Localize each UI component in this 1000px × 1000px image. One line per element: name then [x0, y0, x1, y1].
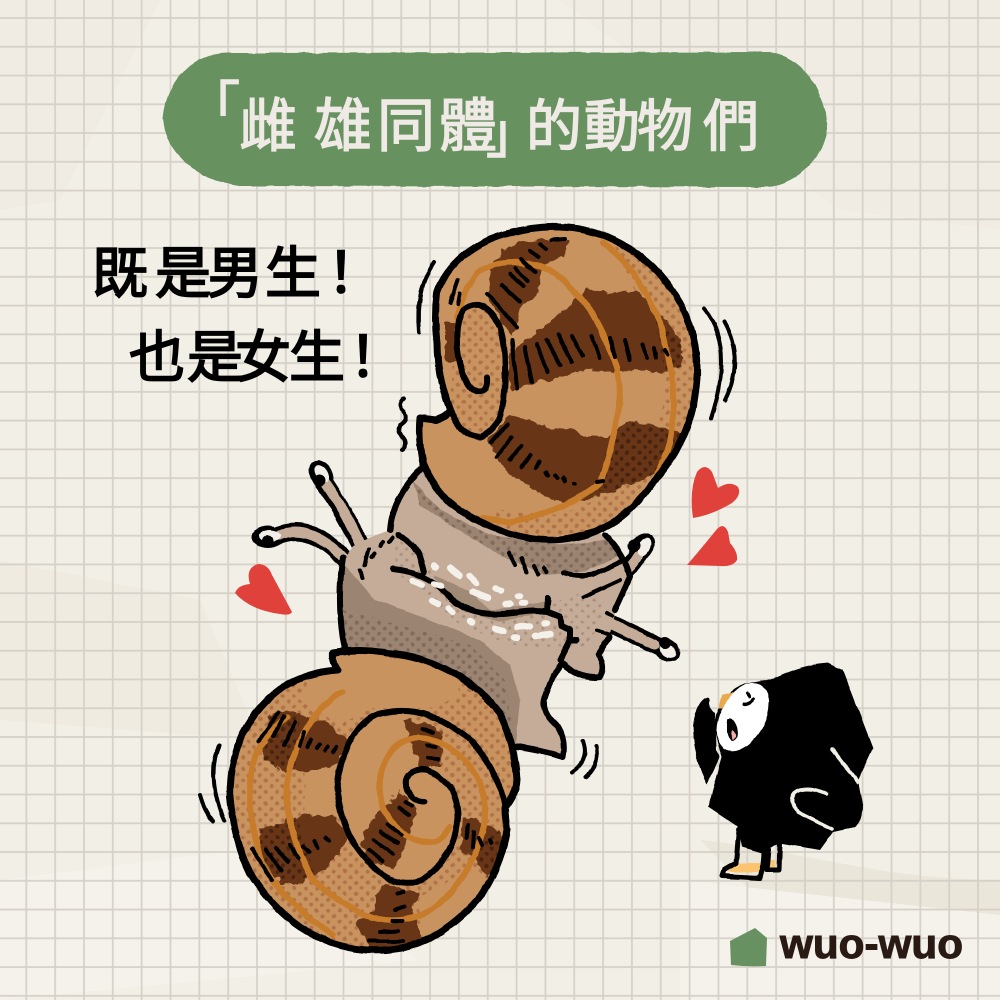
halftone around central seam — [395, 530, 603, 650]
lower shell — [220, 640, 530, 960]
tentacle bulbs — [303, 455, 339, 493]
title opening bracket: 「 — [186, 78, 240, 138]
upper shell hatching — [450, 239, 668, 484]
mouth — [727, 718, 738, 741]
face — [706, 674, 780, 760]
speech text: both male and female — [92, 242, 391, 389]
upper shell black spiral — [450, 305, 505, 437]
lower shell black spiral — [337, 711, 505, 883]
ear — [719, 692, 737, 708]
upper shell outline — [419, 227, 697, 540]
snail tentacles — [252, 455, 685, 667]
body outline — [340, 465, 630, 757]
clothing lines — [832, 749, 858, 782]
central seam between bodies — [393, 569, 577, 660]
head dome line — [398, 535, 424, 572]
title text: 雌雄同體 — [239, 94, 497, 159]
motion lines — [200, 262, 735, 821]
character: black figure looking up — [693, 663, 873, 878]
dot-free areas of lower shell — [300, 654, 460, 723]
legs and shoes — [727, 863, 760, 872]
upper shell brown bands — [445, 240, 683, 502]
upper shell orange lines — [457, 262, 620, 522]
lower shell orange spiral — [286, 692, 485, 920]
white dashes on body — [412, 566, 550, 638]
heart: upper right — [692, 467, 739, 518]
lower shell outline — [230, 650, 517, 950]
illustration: two mating snails — [200, 227, 735, 960]
upper shell — [419, 227, 700, 545]
body — [708, 663, 873, 853]
title closing bracket: 」 — [486, 104, 540, 164]
snail body — [339, 465, 630, 757]
tick marks on body — [360, 538, 620, 634]
raised arm — [693, 697, 720, 784]
title banner — [163, 52, 827, 187]
logo: wordmark: wuo-wuo — [779, 920, 963, 967]
speech text: both male and female: 也是女生！ — [129, 326, 391, 389]
heart: lower right — [687, 526, 737, 566]
title suffix: 的動物們 — [526, 95, 759, 158]
eye — [744, 694, 753, 704]
lower shell brown bands — [257, 712, 503, 950]
speech text: both male and female: 既是男生！ — [92, 242, 369, 305]
heart: left — [235, 564, 292, 615]
logo: house icon — [730, 928, 767, 966]
lower shell hatching — [252, 712, 492, 941]
